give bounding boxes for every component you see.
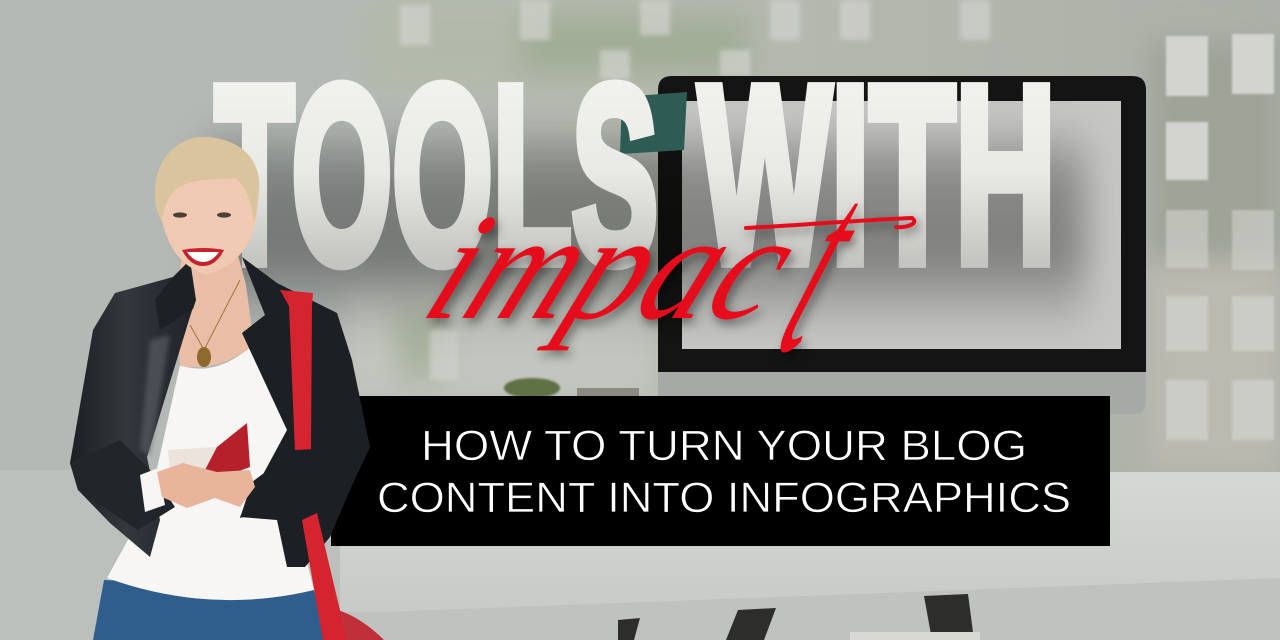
jacket highlight xyxy=(140,335,170,455)
black subtitle box xyxy=(331,396,1110,546)
skin: neck and chest xyxy=(176,255,254,367)
face xyxy=(160,160,257,275)
strap xyxy=(280,290,313,453)
locket necklace xyxy=(190,280,240,350)
accent square xyxy=(620,92,687,154)
hair xyxy=(155,137,259,222)
lower strap xyxy=(302,513,347,640)
monitor xyxy=(658,76,1146,414)
subtitle line 2: CONTENT INTO INFOGRAPHICS xyxy=(377,475,1071,522)
title word: WITH: WITH xyxy=(699,35,1056,316)
phone xyxy=(168,447,222,472)
script word: impact xyxy=(403,120,914,407)
title word: TOOLS: TOOLS xyxy=(215,35,658,316)
jacket left collar xyxy=(155,260,196,330)
locket xyxy=(197,347,211,367)
script crossbar xyxy=(746,218,914,228)
eyes xyxy=(173,212,231,218)
white top xyxy=(107,345,314,600)
title: TOOLS WITH xyxy=(215,35,1056,316)
bag xyxy=(330,610,384,640)
script letter: t: t xyxy=(746,120,905,407)
title shadow xyxy=(205,120,1085,335)
subtitle line 1: HOW TO TURN YOUR BLOG xyxy=(421,423,1027,470)
jacket left side xyxy=(70,277,193,557)
script letters: impac: impac xyxy=(403,184,823,351)
phone wallet xyxy=(160,423,250,480)
plant on desk xyxy=(504,378,639,398)
jacket right side xyxy=(240,257,370,567)
desk xyxy=(0,470,1280,640)
person: woman with phone xyxy=(70,137,384,640)
smile xyxy=(182,248,224,266)
white cuff xyxy=(140,468,165,512)
right forearm xyxy=(240,447,370,518)
jeans xyxy=(93,580,327,640)
hands xyxy=(157,463,255,508)
left forearm xyxy=(70,440,175,530)
